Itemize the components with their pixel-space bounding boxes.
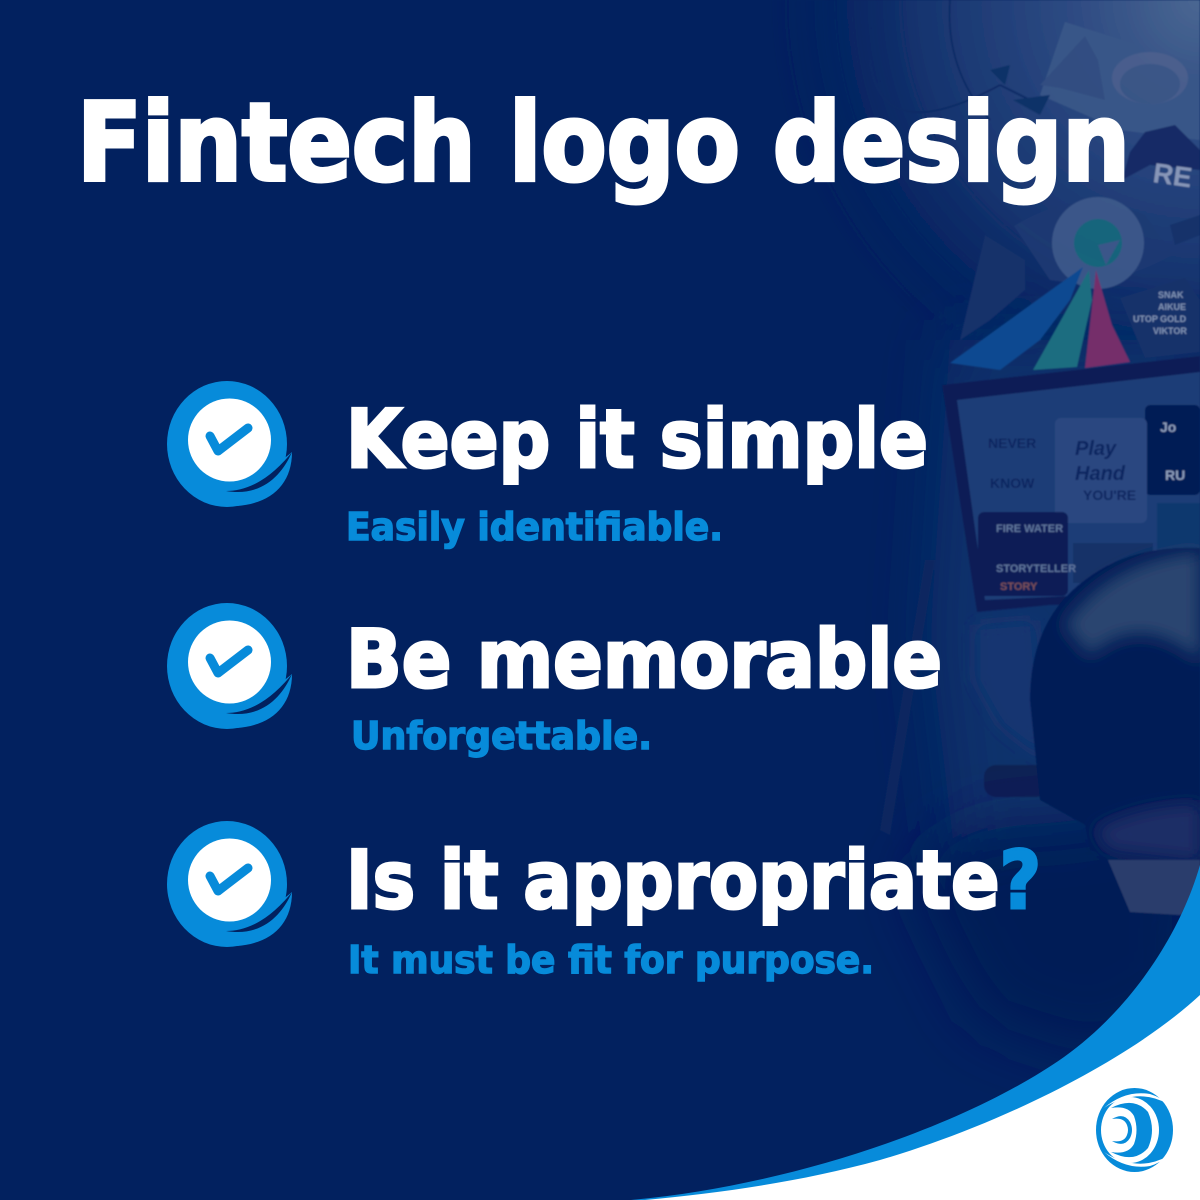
sticker sheet	[1014, 22, 1200, 289]
laptop artwork lettering: KNOW	[990, 475, 1035, 491]
sticker lettering: UTOP GOLD	[1133, 314, 1187, 324]
dark stickers	[960, 235, 1025, 340]
person head	[1030, 548, 1200, 880]
sticker rays	[950, 267, 1083, 370]
heading: be memorable: Be memorable	[346, 613, 942, 706]
plant	[870, 0, 1040, 120]
sticker lettering: SNAK	[1158, 290, 1184, 300]
laptop artwork lettering: Play	[1075, 438, 1117, 460]
background photo: designer desk: Jo	[1160, 419, 1176, 435]
hand and wristband	[975, 620, 1045, 760]
heading: is it appropriate: Is it appropriate?	[346, 834, 1041, 927]
sticker lettering	[1133, 290, 1187, 336]
background photo: designer desk: STORYTELLER	[996, 563, 1076, 575]
corner swoosh	[631, 865, 1200, 1200]
laptop artwork lettering: YOU'RE	[1083, 487, 1136, 503]
sticker lettering: AIKUE	[1158, 302, 1186, 312]
heading: keep it simple: Keep it simple	[346, 393, 928, 486]
person body	[910, 800, 1200, 1060]
background photo: designer desk	[740, 0, 1200, 1060]
checklist item 2	[167, 603, 942, 758]
icon: company logo spiral	[1096, 1088, 1173, 1172]
subheading: unforgettable: Unforgettable.	[351, 714, 652, 758]
laptop artwork lettering: NEVER	[988, 435, 1036, 451]
laptop	[942, 356, 1200, 612]
background photo: designer desk: FIRE WATER	[996, 523, 1063, 535]
background photo: designer desk: RE	[1151, 157, 1194, 193]
background photo: designer desk: STORY	[1000, 581, 1038, 593]
laptop artwork lettering: Hand	[1075, 463, 1126, 485]
icon: check badge 1	[167, 381, 292, 507]
laptop artwork lettering	[988, 435, 1136, 503]
checklist item 3	[167, 821, 1041, 982]
sticker lettering: VIKTOR	[1153, 326, 1187, 336]
laptop artwork cards	[1145, 405, 1200, 495]
checklist item 1	[167, 381, 928, 549]
subheading: fit for purpose: It must be fit for purpose.	[348, 938, 874, 982]
subheading: easily identifiable: Easily identifiable.	[346, 505, 723, 549]
background photo: designer desk: RU	[1165, 467, 1185, 483]
icon: check badge 2	[167, 603, 292, 729]
icon: check badge 3	[167, 821, 292, 947]
